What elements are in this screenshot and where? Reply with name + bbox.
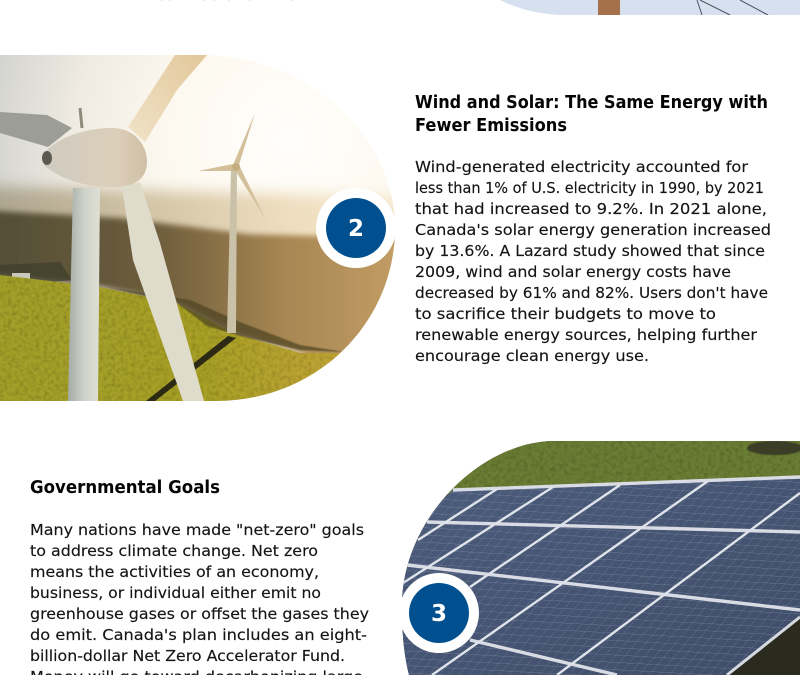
distant haze band bbox=[0, 179, 395, 238]
diagonal rails bbox=[403, 481, 800, 675]
text: wind and solar paragraph: less than 1% of U.S. electricity in 1990, by 2021 bbox=[415, 179, 764, 197]
text: wind and solar paragraph: Canada's solar energy generation increased bbox=[415, 221, 771, 239]
text: wind and solar paragraph: by 13.6%. A Lazard study showed that since bbox=[415, 242, 765, 260]
text: wind and solar paragraph: that had increased to 9.2%. In 2021 alone, bbox=[415, 200, 767, 218]
text: wind and solar paragraph: to sacrifice their budgets to move to bbox=[415, 305, 716, 323]
text: governmental goals paragraph: greenhouse gases or offset the gases they bbox=[30, 605, 369, 623]
photo: solar panel array on grass bbox=[400, 441, 800, 675]
text: governmental goals paragraph: to address climate change. Net zero bbox=[30, 542, 318, 560]
text: governmental goals paragraph: business, or individual either emit no bbox=[30, 584, 321, 602]
small turbine bbox=[198, 113, 265, 333]
text: governmental goals paragraph: Many nations have made "net-zero" goals bbox=[30, 521, 364, 539]
large turbine tower bbox=[68, 188, 100, 401]
text: governmental goals paragraph bbox=[30, 521, 369, 675]
text: wind and solar paragraph: decreased by 61% and 82%. Users don't have bbox=[415, 284, 768, 302]
text: wind and solar paragraph: Wind-generated electricity accounted for bbox=[415, 158, 749, 176]
number badge 2: 2 bbox=[348, 216, 364, 242]
heading: governmental goals: Governmental Goals bbox=[30, 478, 220, 498]
turbine shadow bbox=[146, 336, 236, 401]
blade pointing down bbox=[122, 182, 204, 401]
text: wind and solar paragraph: encourage clean energy use. bbox=[415, 347, 649, 365]
number badge 3: 3 bbox=[431, 601, 447, 627]
nacelle bbox=[44, 128, 147, 187]
tree shadow on field bbox=[105, 287, 345, 352]
forest band bbox=[0, 210, 420, 370]
blade pointing left bbox=[0, 112, 72, 147]
text: governmental goals paragraph: do emit. Canada's plan includes an eight- bbox=[30, 626, 367, 644]
heading: wind and solar: Fewer Emissions bbox=[415, 116, 567, 136]
text: wind and solar paragraph bbox=[415, 158, 771, 365]
number badge 3 bbox=[399, 573, 479, 653]
number badge 2 bbox=[316, 188, 396, 268]
text: wind and solar paragraph: renewable energy sources, helping further bbox=[415, 326, 758, 344]
text: governmental goals paragraph: billion-dollar Net Zero Accelerator Fund. bbox=[30, 647, 345, 665]
blade pointing up bbox=[128, 55, 207, 142]
grass field bbox=[0, 275, 345, 410]
horizontal rails bbox=[407, 477, 800, 675]
village houses bbox=[0, 262, 71, 282]
photo: wind turbines on a green field at sunset bbox=[0, 55, 395, 401]
photo: utility pole and sky sliver bbox=[490, 0, 800, 15]
panel surface bbox=[400, 477, 800, 675]
panel edge bbox=[727, 617, 800, 675]
antenna bbox=[80, 108, 82, 128]
text: wind and solar paragraph: 2009, wind and solar energy costs have bbox=[415, 263, 731, 281]
grass background bbox=[446, 441, 800, 496]
text: governmental goals paragraph: means the activities of an economy, bbox=[30, 563, 319, 581]
heading: wind and solar bbox=[415, 93, 768, 136]
heading: wind and solar: Wind and Solar: The Same Energy with bbox=[415, 93, 768, 113]
